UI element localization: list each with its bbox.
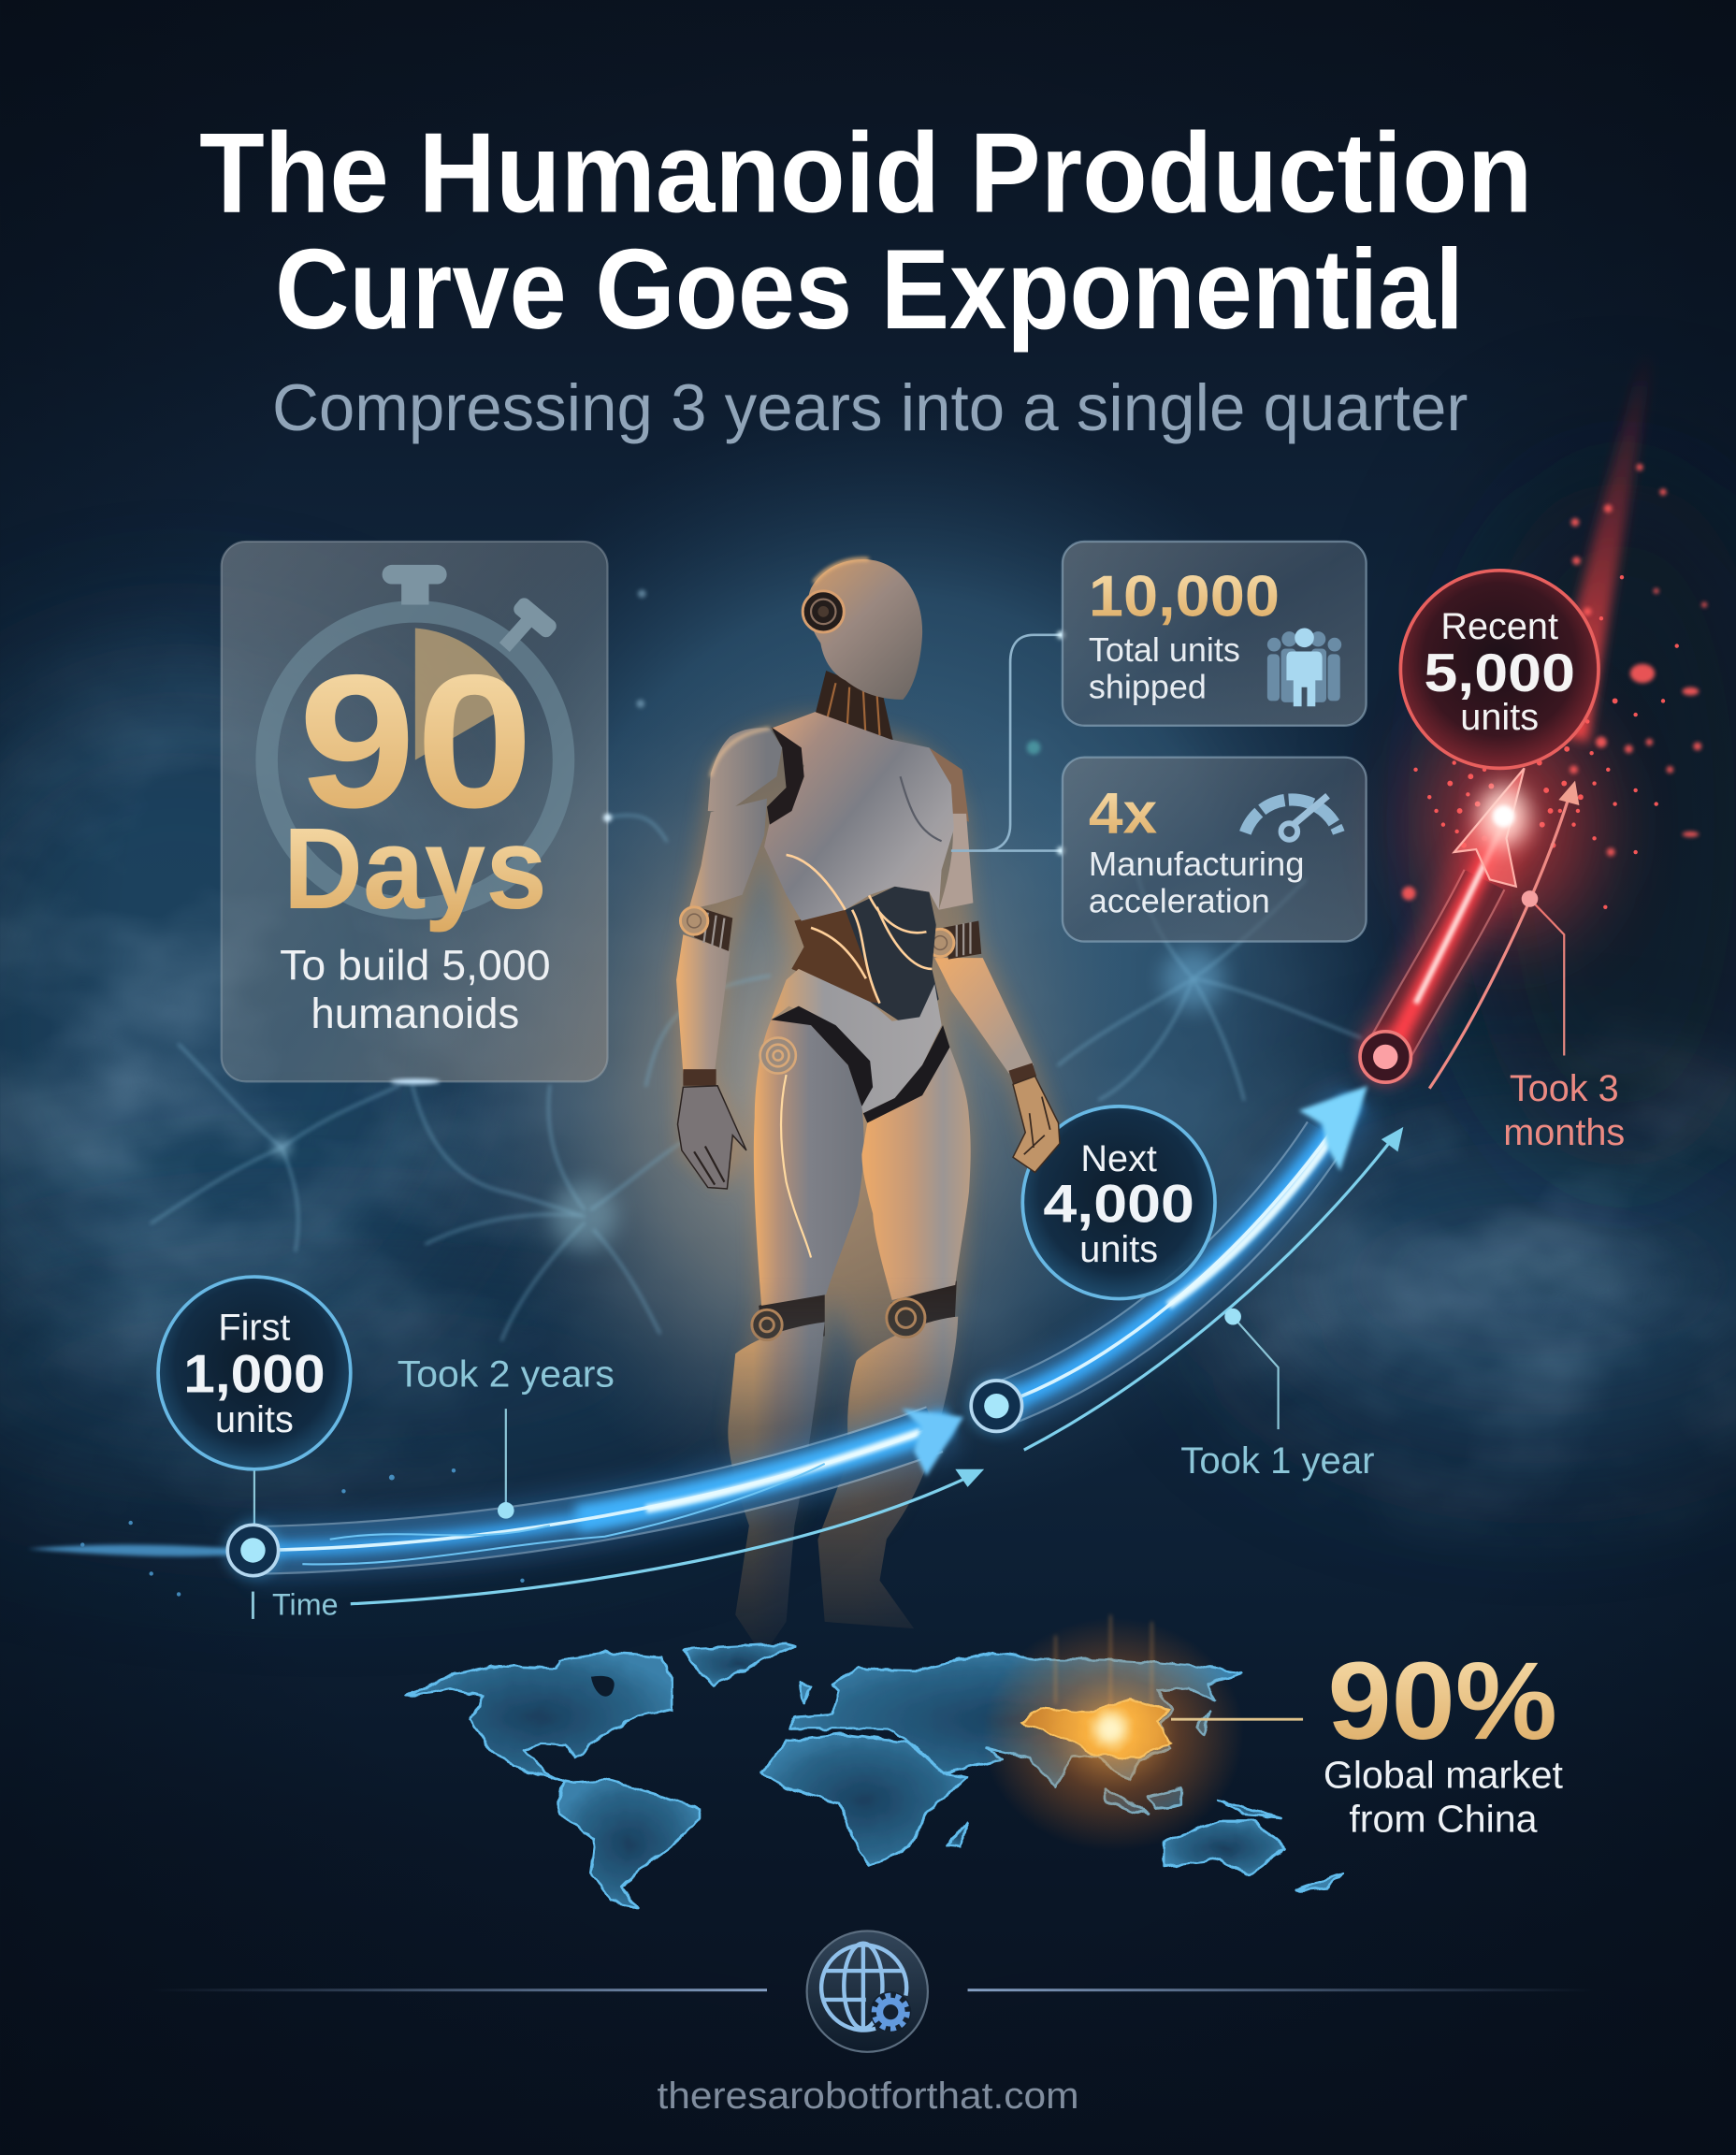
label Days: Days bbox=[283, 804, 547, 933]
milestone: first 1000 units: units bbox=[215, 1399, 294, 1440]
china highlight bbox=[1021, 1699, 1172, 1757]
footer divider bbox=[152, 1989, 1595, 1991]
robot right shin bbox=[817, 1317, 958, 1628]
website url: theresarobotforthat.com bbox=[657, 2075, 1079, 2117]
robot left wrist and hand bbox=[677, 1069, 746, 1189]
duration labels bbox=[398, 1068, 1625, 1482]
stat panel: 90 days bbox=[222, 542, 612, 1084]
title: Curve Goes Exponential bbox=[275, 225, 1464, 353]
milestone: next 4000 units bbox=[1022, 1106, 1215, 1299]
red streak and sparks bbox=[1402, 351, 1707, 932]
robot right forearm bbox=[934, 958, 1034, 1074]
duration labels: months bbox=[1503, 1112, 1625, 1153]
icon: stopwatch bbox=[267, 565, 564, 908]
description: humanoids bbox=[311, 990, 519, 1037]
thin trend arrows bbox=[351, 781, 1579, 1604]
stat card: 10,000 total units bbox=[1063, 542, 1367, 726]
china glow bbox=[983, 1617, 1244, 1851]
milestone: next 4000 units: Next bbox=[1080, 1138, 1157, 1179]
connectors to cards bbox=[951, 630, 1065, 855]
robot right shoulder cap bbox=[929, 747, 969, 822]
title: The Humanoid Production bbox=[199, 108, 1532, 236]
blue segment two: next 4000 bbox=[996, 1086, 1367, 1406]
stat: 90 percent from china: from China bbox=[1349, 1798, 1538, 1841]
robot left elbow bbox=[680, 907, 732, 951]
milestone: first 1000 units: First bbox=[218, 1308, 290, 1349]
milestone: recent 5000 units bbox=[1400, 571, 1599, 768]
milestone: recent 5000 units: 5,000 bbox=[1424, 644, 1575, 703]
subtitle: Compressing 3 years into a single quarter bbox=[272, 370, 1468, 444]
robot hips bbox=[771, 969, 949, 1122]
label: Total units bbox=[1089, 630, 1240, 669]
label: Manufacturing bbox=[1089, 845, 1305, 883]
stat: 90 percent from china: 90% bbox=[1328, 1640, 1557, 1762]
robot torso bbox=[764, 712, 954, 920]
world map bbox=[406, 1615, 1343, 1908]
blue segment one: first 1000 bbox=[253, 1409, 963, 1564]
stat: 90 percent from china: Global market bbox=[1324, 1754, 1564, 1797]
stat card: 4x acceleration bbox=[1063, 758, 1367, 942]
nodes bbox=[223, 890, 1538, 1581]
icon: gauge bbox=[1245, 796, 1338, 840]
robot left upper arm bbox=[688, 799, 767, 910]
robot ear sensor bbox=[803, 591, 844, 632]
robot knees bbox=[752, 1299, 925, 1340]
milestone: recent 5000 units: units bbox=[1460, 697, 1539, 738]
duration labels: Took 2 years bbox=[398, 1354, 615, 1396]
robot left shin bbox=[728, 1323, 825, 1656]
big number 90: 90 bbox=[298, 635, 533, 847]
description bbox=[280, 942, 551, 1037]
milestone: recent 5000 units: Recent bbox=[1440, 606, 1558, 647]
time label: Time bbox=[272, 1588, 339, 1622]
title bbox=[199, 108, 1532, 353]
robot head bbox=[807, 559, 922, 700]
robot figure bbox=[676, 559, 1061, 1656]
robot right elbow bbox=[926, 920, 981, 960]
label bbox=[1089, 845, 1305, 920]
label: shipped bbox=[1089, 667, 1207, 705]
value: 10,000 bbox=[1089, 564, 1280, 629]
label stems bbox=[254, 899, 1564, 1526]
robot left thigh bbox=[754, 1015, 864, 1306]
neck bbox=[816, 671, 893, 740]
duration labels: Took 3 bbox=[1510, 1068, 1619, 1109]
robot glow rim bbox=[676, 715, 1061, 1540]
icon: globe with gear bbox=[807, 1931, 928, 2052]
icon: people bbox=[1267, 629, 1341, 706]
label bbox=[1089, 630, 1240, 705]
neuron network bbox=[152, 589, 1361, 1340]
robot left forearm bbox=[676, 934, 730, 1074]
stat: 90 percent from china bbox=[1324, 1640, 1564, 1841]
milestone: first 1000 units bbox=[158, 1277, 351, 1469]
growth curve bbox=[27, 351, 1707, 1622]
label: acceleration bbox=[1089, 882, 1270, 920]
robot left shoulder bbox=[708, 727, 804, 825]
robot right hand bbox=[1008, 1063, 1060, 1172]
robot hip disc bbox=[760, 1037, 796, 1074]
robot right thigh bbox=[861, 1048, 971, 1300]
red segment three: recent 5000 bbox=[1385, 768, 1528, 1057]
milestone: first 1000 units: 1,000 bbox=[183, 1344, 326, 1404]
blue sparkle dots bbox=[27, 1468, 525, 1597]
value: 4x bbox=[1089, 781, 1157, 846]
description: To build 5,000 bbox=[280, 942, 551, 990]
robot right upper arm bbox=[939, 814, 973, 910]
milestone: next 4000 units: units bbox=[1079, 1229, 1158, 1270]
robot knee shadows bbox=[759, 1280, 957, 1374]
milestone: next 4000 units: 4,000 bbox=[1043, 1174, 1194, 1234]
duration labels: Took 1 year bbox=[1180, 1440, 1374, 1482]
robot waist bbox=[791, 887, 939, 1022]
